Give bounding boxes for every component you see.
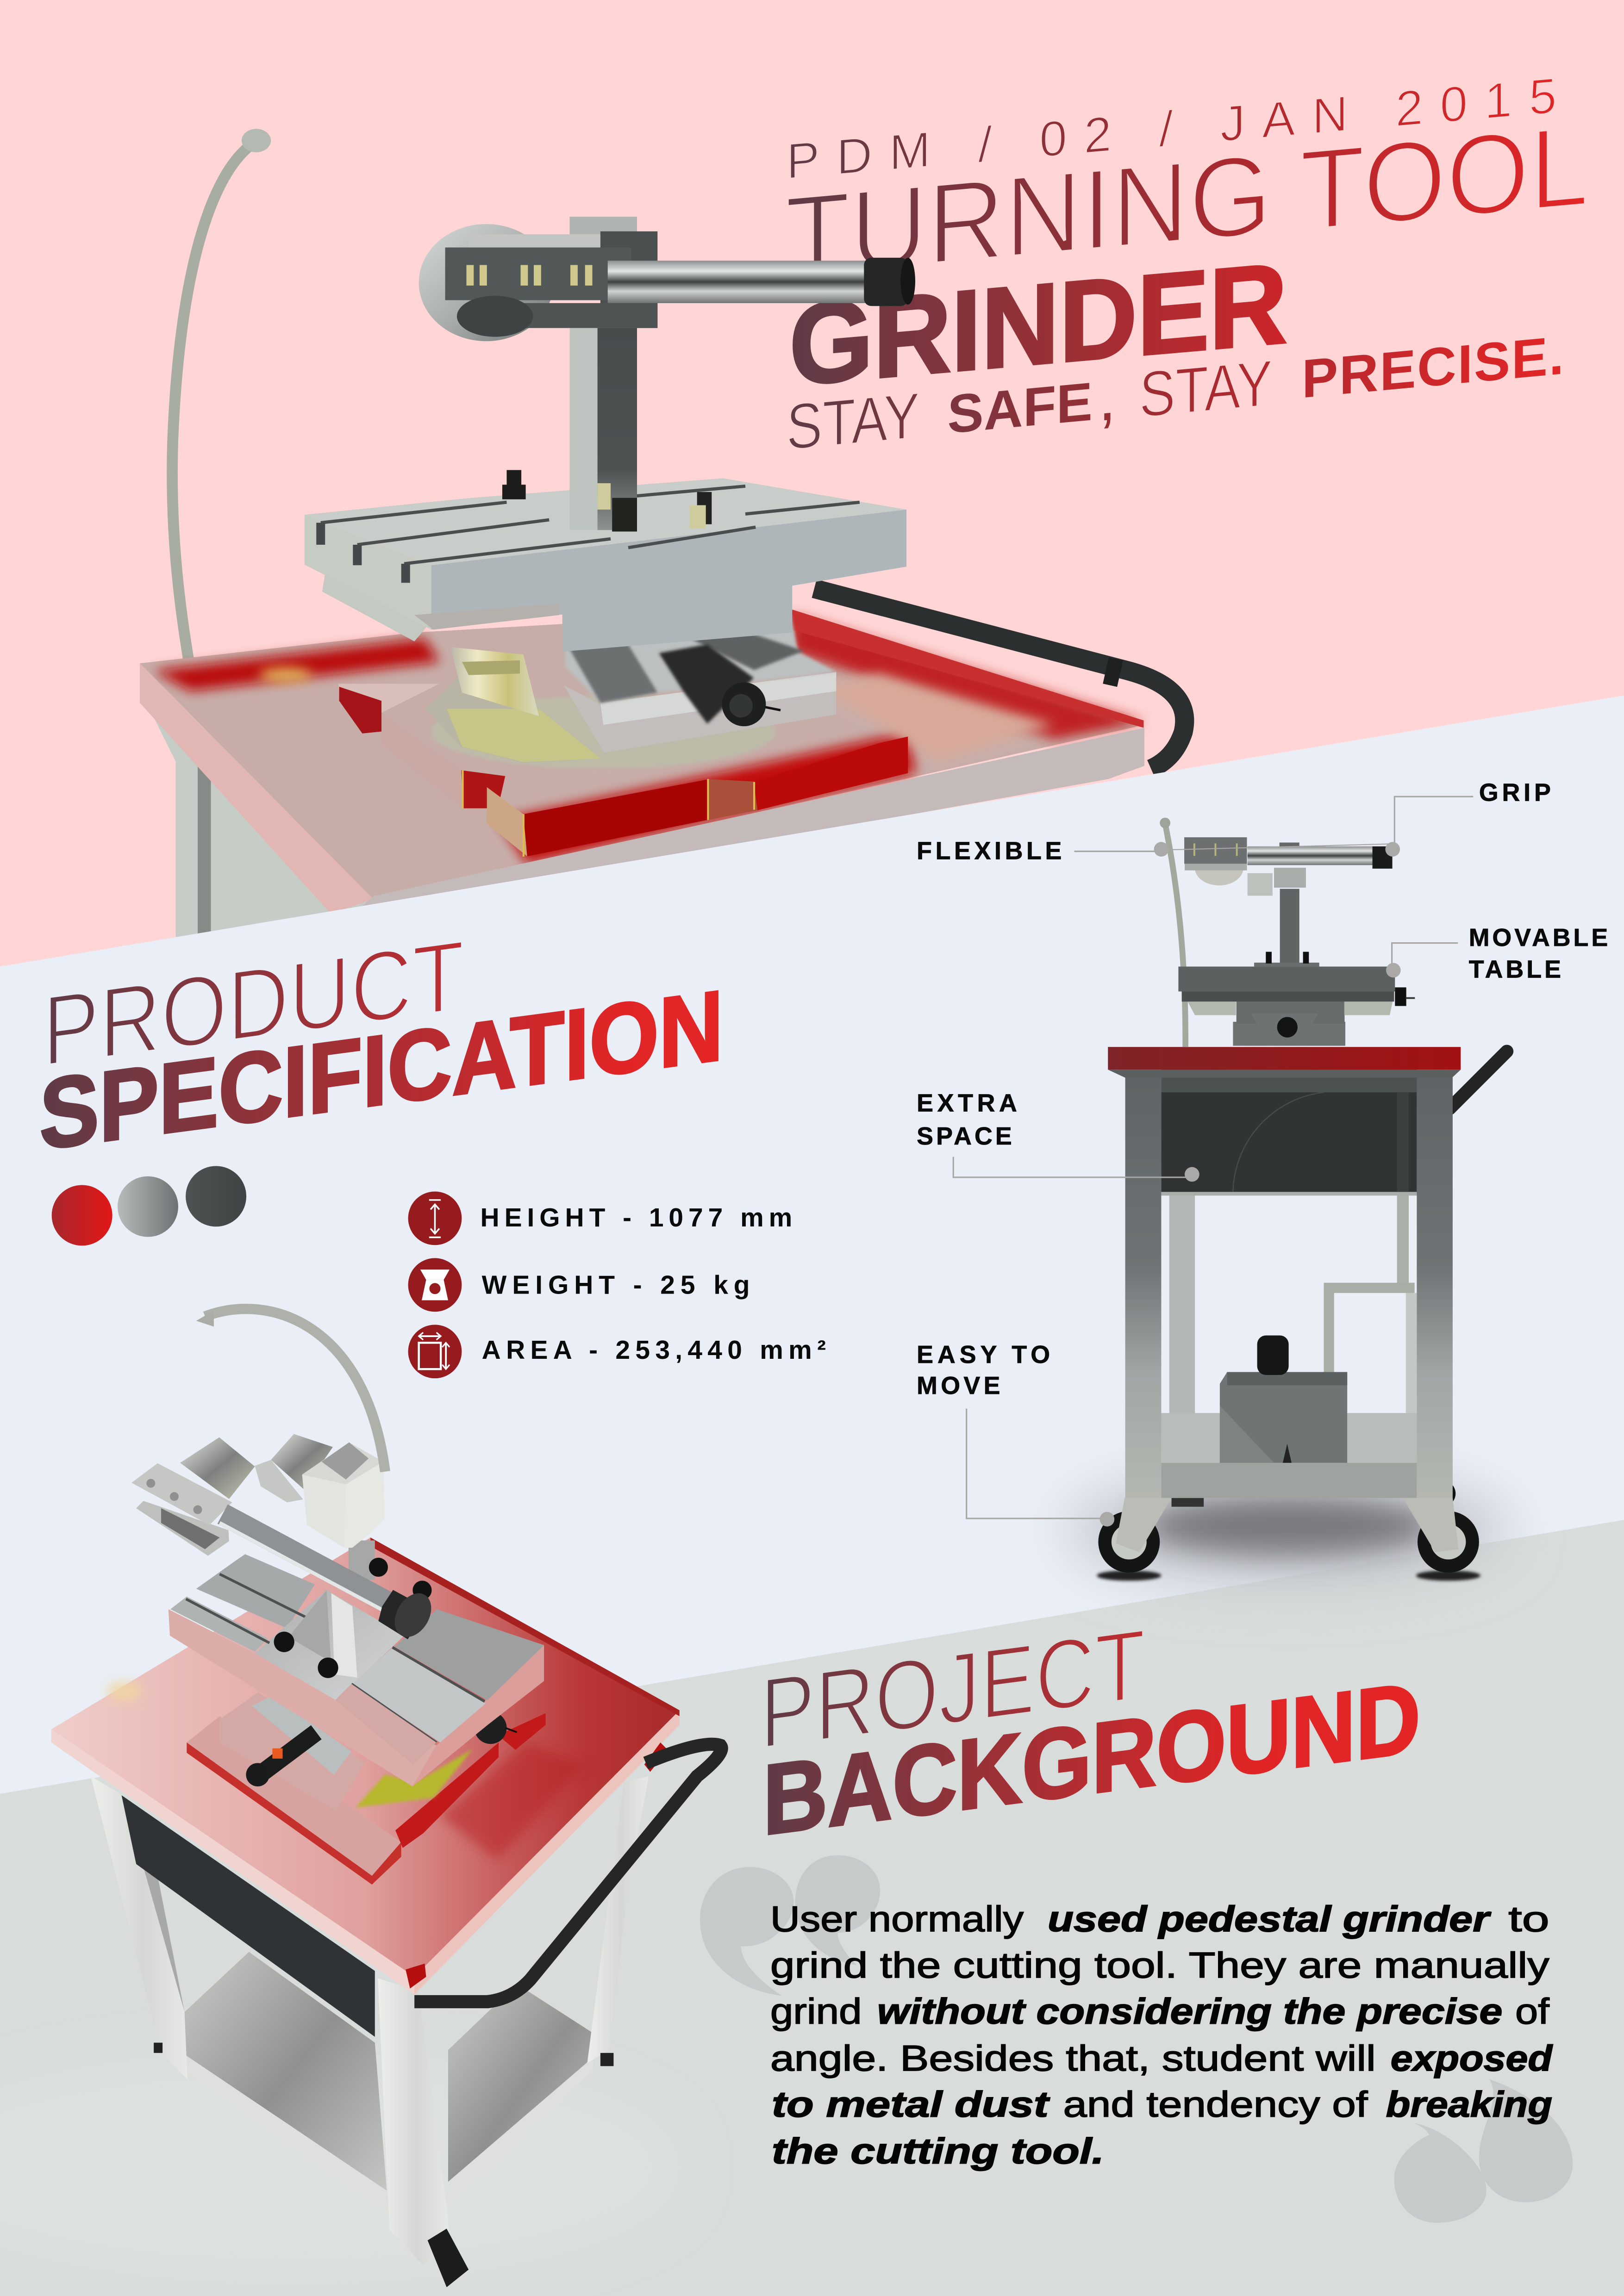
icon: area xyxy=(408,1325,462,1378)
mini cross slide xyxy=(1233,991,1345,1046)
grip cap xyxy=(864,258,915,306)
title: turning tool: TURNING TOOL xyxy=(785,101,1589,301)
vertical post xyxy=(569,328,637,530)
tray xyxy=(140,609,1144,915)
callout: extra space xyxy=(917,1089,1199,1182)
cone xyxy=(425,647,600,763)
handle xyxy=(414,1744,721,2002)
body text: grind xyxy=(770,1992,862,2032)
body text: angle. Besides that, student will xyxy=(770,2039,1376,2078)
spec: weight: WEIGHT - 25 kg xyxy=(482,1270,750,1300)
mini rod xyxy=(1248,843,1373,865)
mini post xyxy=(1254,889,1319,967)
tagline: STAY xyxy=(1139,347,1273,431)
panel: grey background band xyxy=(0,1520,1624,2296)
drawer xyxy=(122,1795,375,2037)
heading: product specification xyxy=(39,919,724,1170)
mini clamp xyxy=(1184,837,1306,896)
colour swatches xyxy=(52,1166,246,1246)
callout: grip: GRIP xyxy=(1479,779,1551,807)
heading line one: PRODUCT xyxy=(43,919,464,1087)
panel: pink header background xyxy=(0,0,1624,1025)
left leg xyxy=(91,1776,187,2079)
cylinder rod xyxy=(608,261,881,303)
tagline: STAY xyxy=(787,379,919,463)
rear wheel hints xyxy=(1172,1481,1455,1507)
date line: PDM / 02 / JAN 2015 xyxy=(787,67,1556,189)
front leg xyxy=(378,1978,450,2265)
clamp plates xyxy=(131,1463,232,1556)
spec: height xyxy=(408,1191,792,1245)
T-slot table xyxy=(305,478,906,652)
back handle xyxy=(814,589,1185,769)
hose xyxy=(172,129,271,662)
rotary disc and plates xyxy=(338,684,908,857)
shelf rails xyxy=(185,2054,593,2217)
body text: to metal dust xyxy=(772,2085,1050,2125)
mini table xyxy=(1178,966,1415,1015)
icon: height xyxy=(408,1191,462,1245)
callout: easy to move: EASY TO xyxy=(917,1341,1050,1369)
spec: weight xyxy=(408,1258,750,1312)
upper block xyxy=(302,1442,385,1548)
base plates xyxy=(187,1713,546,1885)
callout: easy to move xyxy=(917,1341,1114,1526)
T-slot table xyxy=(169,1554,544,1786)
callout: extra space: EXTRA xyxy=(917,1089,1017,1117)
callout: extra space: SPACE xyxy=(917,1122,1012,1150)
spec: area: AREA - 253,440 mm² xyxy=(482,1335,826,1365)
table bolts xyxy=(274,1558,432,1678)
rear legs xyxy=(1169,1195,1417,1414)
rear right leg xyxy=(587,1776,649,2063)
body text: used pedestal grinder xyxy=(1048,1899,1492,1939)
motor housing xyxy=(1220,1372,1347,1463)
illustration: isometric view of trolley xyxy=(51,1309,721,2287)
quote marks xyxy=(700,1855,1573,2223)
icon: scale xyxy=(408,1258,462,1312)
handle xyxy=(1450,1052,1507,1108)
title block xyxy=(785,67,1589,463)
callout: movable table: MOVABLE xyxy=(1469,924,1608,952)
casters xyxy=(1098,1498,1479,1573)
ground light xyxy=(0,2065,674,2270)
front legs xyxy=(1125,1073,1453,1501)
drawer shelf line xyxy=(1161,1192,1417,1195)
closing quote xyxy=(1394,2079,1573,2223)
body text: breaking xyxy=(1386,2085,1552,2125)
opening quote xyxy=(700,1855,880,1996)
red table top xyxy=(1108,1047,1461,1070)
inner leg xyxy=(136,1864,185,2035)
heading line two: SPECIFICATION xyxy=(39,969,724,1170)
lower slide with knob xyxy=(219,1692,517,1811)
panel: pale blue specification band xyxy=(0,696,1624,1904)
hose xyxy=(196,1309,385,1472)
grip cap xyxy=(378,1587,438,1643)
drawer xyxy=(1161,1069,1417,1192)
yellow disc xyxy=(356,1749,473,1808)
spec: height: HEIGHT - 1077 mm xyxy=(481,1203,792,1232)
callout: grip xyxy=(1161,779,1551,857)
clamp block xyxy=(445,217,657,337)
clamp disc xyxy=(419,224,554,341)
callout: easy to move: MOVE xyxy=(917,1372,1000,1400)
table chamfer xyxy=(1108,1070,1461,1078)
heading line two: BACKGROUND xyxy=(763,1661,1420,1856)
spec: area xyxy=(408,1325,826,1378)
post xyxy=(288,1540,375,1678)
body text: grind the cutting tool. They are manually xyxy=(770,1946,1549,1985)
rod xyxy=(219,1514,389,1612)
rollers xyxy=(180,1434,333,1502)
body text: and tendency of xyxy=(1063,2085,1368,2125)
right shelf xyxy=(448,1984,599,2196)
body text: to xyxy=(1508,1899,1549,1939)
heading: project background xyxy=(760,1608,1420,1856)
table bolts xyxy=(502,470,712,531)
tray xyxy=(51,1537,680,1994)
body text: of xyxy=(1515,1992,1549,2032)
body text: User normally xyxy=(770,1899,1024,1939)
illustration: front view of trolley xyxy=(1069,818,1508,1586)
body text xyxy=(770,1899,1553,2171)
callout: flexible: FLEXIBLE xyxy=(917,837,1062,865)
dovetail slide and knob xyxy=(564,615,836,753)
body text: the cutting tool. xyxy=(772,2131,1104,2171)
mini hose xyxy=(1160,818,1186,1047)
casters xyxy=(154,2043,613,2287)
illustration: large close-up of grinder jig xyxy=(140,129,1185,937)
callout: movable table xyxy=(1386,924,1608,983)
mini cap xyxy=(1373,846,1393,869)
motor knob xyxy=(1257,1335,1289,1375)
title: grinder: GRINDER xyxy=(789,239,1287,410)
callout: movable table: TABLE xyxy=(1469,956,1561,983)
tube xyxy=(1329,1288,1415,1379)
body text: exposed xyxy=(1391,2039,1553,2078)
tagline: SAFE xyxy=(948,371,1093,445)
lower shelf xyxy=(1161,1413,1417,1498)
floor shadow xyxy=(1069,1475,1508,1586)
heading line one: PROJECT xyxy=(760,1608,1145,1770)
left shelf xyxy=(183,1952,388,2207)
tagline: PRECISE. xyxy=(1302,324,1564,409)
tagline: , xyxy=(1098,361,1116,435)
tagline xyxy=(787,320,1564,463)
trolley leg xyxy=(146,703,381,937)
callout: flexible xyxy=(917,837,1168,865)
body text: without considering the precise xyxy=(877,1992,1502,2032)
